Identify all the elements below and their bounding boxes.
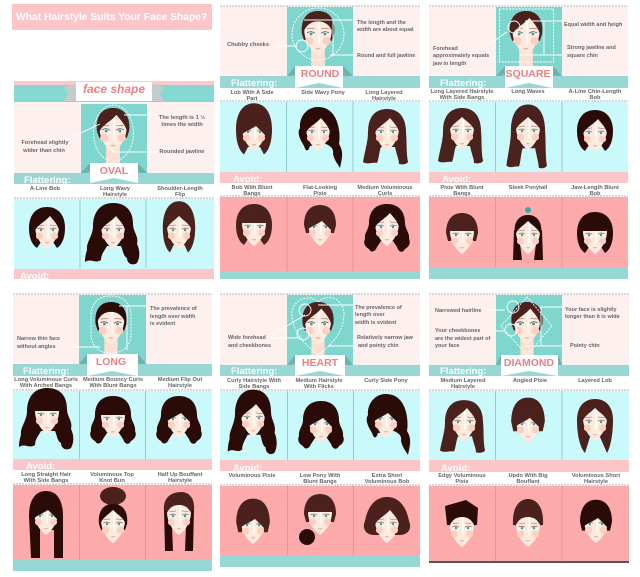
heart avoid hairstyles: [236, 494, 410, 545]
long flattering labels: Medium Flip Out: [158, 377, 202, 383]
face shape ribbon: [64, 82, 164, 101]
round flattering labels: [230, 90, 403, 102]
flattering heading: Flattering:: [440, 78, 486, 89]
long flattering labels: [14, 377, 202, 389]
heart avoid labels: Blunt Bangs: [303, 479, 337, 485]
round notes: [227, 20, 415, 59]
long notes: The prevalence of: [150, 306, 197, 312]
diamond diagram lines: [486, 297, 565, 355]
diamond avoid labels: Pixie: [455, 479, 469, 485]
square notes: [432, 22, 623, 67]
square notes: approximately equals: [433, 53, 489, 59]
title: What Hairstyle Suits Your Face Shape?: [16, 12, 207, 23]
diamond avoid hairstyles: [445, 499, 612, 547]
round flattering labels: Side Wavy Pony: [301, 90, 346, 96]
long flattering labels: Hairstyle: [168, 383, 192, 389]
square flattering labels: Long Layered Hairstyle: [431, 89, 493, 95]
square avoid labels: Sleek Ponytail: [509, 185, 548, 191]
diamond notes: are the widest part of: [435, 336, 490, 342]
panel: diamond: [429, 294, 629, 563]
oval flattering hairstyles: [29, 201, 195, 264]
heart notes: length over: [355, 312, 386, 318]
diamond avoid labels: Edgy Voluminous: [438, 473, 486, 479]
avoid heading: Avoid:: [233, 174, 262, 185]
long notes: Narrow thin face: [17, 336, 60, 342]
diamond flattering labels: Hairstyle: [451, 384, 475, 390]
long notes: is evident: [150, 321, 176, 327]
oval flattering labels: A-Line Bob: [30, 186, 61, 192]
long banner: [79, 354, 146, 376]
round notes: Chubby cheeks: [227, 42, 269, 48]
diamond flattering labels: Medium Layered: [441, 378, 486, 384]
square notes: Forehead: [433, 46, 458, 52]
diamond notes: Your face is slightly: [565, 307, 617, 313]
square notes: Strong jawline and: [567, 45, 616, 51]
diamond flattering labels: Angled Pixie: [513, 378, 547, 384]
round avoid labels: Curls: [378, 191, 392, 197]
heart flattering labels: Curly Side Pony: [364, 378, 409, 384]
round flattering hairstyles: [236, 103, 408, 168]
diamond flattering hairstyles: [440, 398, 613, 453]
oval diagram lines: [66, 105, 157, 161]
square diagram lines: [485, 9, 562, 62]
heart notes: Wide forehead: [228, 335, 266, 341]
oval flattering labels: Shoulder-Length: [157, 186, 203, 192]
oval notes: [21, 114, 205, 155]
panel: oval: [14, 81, 214, 282]
diamond flattering labels: Layered Lob: [578, 378, 612, 384]
oval notes: times the width: [161, 122, 203, 128]
round avoid labels: Bangs: [243, 191, 261, 197]
diamond avoid labels: Hairstyle: [584, 479, 608, 485]
oval notes: Rounded jawline: [159, 149, 205, 155]
diamond notes: your face: [435, 343, 459, 349]
oval flattering labels: Hairstyle: [103, 192, 127, 198]
square avoid labels: Bob: [589, 191, 601, 197]
avoid heading: Avoid:: [442, 174, 471, 185]
avoid heading: Avoid:: [26, 461, 55, 472]
heart flattering labels: With Flicks: [304, 384, 334, 390]
diamond banner: [496, 355, 562, 376]
heart avoid labels: [229, 473, 410, 485]
long avoid labels: Voluminous Top: [90, 472, 134, 478]
long flattering labels: With Arched Bangs: [20, 383, 72, 389]
round banner: ROUND: [301, 68, 340, 80]
heart flattering labels: Curly Hairstyle With: [227, 378, 282, 384]
long notes: length over width: [150, 314, 196, 320]
round avoid labels: Pixie: [313, 191, 327, 197]
flattering heading: Flattering:: [23, 366, 69, 377]
heart notes: [228, 305, 414, 349]
diamond notes: Your cheekbones: [435, 328, 480, 334]
long notes: [16, 306, 197, 350]
avoid heading: Avoid:: [441, 463, 470, 474]
panel: heart: [220, 294, 420, 567]
diamond notes: [435, 307, 620, 349]
heart flattering hairstyles: [228, 390, 410, 455]
square banner: SQUARE: [506, 68, 550, 80]
heart avoid labels: Low Pony With: [300, 473, 341, 479]
oval banner: [81, 163, 147, 183]
round flattering labels: Lob With A Side: [230, 90, 274, 96]
heart flattering labels: [227, 378, 409, 390]
diamond avoid labels: Bouffant: [516, 479, 540, 485]
heart avoid labels: Extra Short: [372, 473, 402, 479]
long avoid labels: [21, 472, 203, 484]
avoid heading: Avoid:: [20, 271, 49, 282]
round flattering labels: Long Layered: [365, 90, 403, 96]
square notes: Equal width and heigh: [564, 22, 623, 28]
round notes: width are about equal: [356, 27, 414, 33]
round notes: The length and the: [357, 20, 406, 26]
round flattering labels: Hairstyle: [372, 96, 396, 102]
square flattering labels: Long Waves: [511, 89, 545, 95]
flattering heading: Flattering:: [231, 78, 277, 89]
heart banner: [287, 355, 353, 376]
flattering heading: Flattering:: [440, 366, 486, 377]
round avoid hairstyles: [236, 204, 410, 252]
square avoid hairstyles: [446, 207, 613, 260]
oval notes: The length is 1 ½: [159, 114, 205, 121]
avoid heading: Avoid:: [233, 463, 262, 474]
oval banner: OVAL: [100, 165, 129, 177]
panel: long: [13, 294, 212, 571]
flattering heading: Flattering:: [231, 366, 277, 377]
long banner: LONG: [96, 356, 126, 368]
long flattering labels: Long Voluminous Curls: [14, 377, 78, 383]
long flattering hairstyles: [19, 388, 202, 449]
long notes: without angles: [16, 344, 56, 350]
square notes: jaw in length: [432, 61, 467, 67]
square notes: square chin: [567, 53, 599, 59]
heart diagram lines: [272, 297, 355, 355]
round diagram lines: [275, 8, 355, 60]
square avoid labels: [440, 185, 619, 197]
oval notes: wider than chin: [22, 148, 65, 154]
diamond notes: Narrowed hairline: [435, 308, 481, 314]
long flattering labels: With Blunt Bangs: [89, 383, 137, 389]
heart flattering labels: Medium Hairstyle: [295, 378, 343, 384]
heart portrait: [289, 302, 347, 366]
heart notes: and pointy chin: [358, 343, 399, 349]
long avoid labels: Hairstyle: [168, 478, 192, 484]
diamond avoid labels: Voluminous Short: [572, 473, 620, 479]
heart notes: and cheekbones: [228, 343, 271, 349]
diamond banner: DIAMOND: [504, 357, 554, 369]
round avoid labels: Bob With Blunt: [231, 185, 273, 191]
oval flattering labels: [30, 186, 203, 198]
oval flattering labels: Long Wavy: [100, 186, 131, 192]
oval portrait: [83, 108, 143, 175]
round avoid labels: Flat-Looking: [303, 185, 338, 191]
round avoid labels: Medium Voluminous: [357, 185, 413, 191]
heart banner: HEART: [302, 357, 339, 369]
round banner: [287, 66, 353, 88]
square flattering labels: [431, 89, 622, 101]
square banner: [496, 66, 562, 88]
long portrait: [82, 302, 140, 366]
diamond notes: Pointy chin: [570, 343, 600, 349]
diamond portrait: [498, 302, 556, 366]
long flattering labels: Medium Bouncy Curls: [83, 377, 143, 383]
long avoid labels: With Side Bangs: [24, 478, 68, 484]
diamond notes: longer than it is wide: [565, 314, 620, 320]
oval notes: Forehead slightly: [21, 140, 69, 146]
square avoid labels: Bangs: [453, 191, 471, 197]
panel: square: [429, 6, 628, 279]
heart flattering labels: Side Bangs: [239, 384, 269, 390]
round flattering labels: Part: [246, 96, 258, 102]
long avoid labels: Long Straight Hair: [21, 472, 72, 478]
diamond avoid labels: Updo With Big: [508, 473, 548, 479]
face shape ribbon: face shape: [83, 82, 145, 96]
heart avoid labels: Voluminous Pixie: [229, 473, 275, 479]
heart notes: Relatively narrow jaw: [357, 335, 414, 341]
panel: round: [220, 6, 420, 279]
long diagram lines: [71, 296, 147, 353]
round notes: Round and full jawline: [357, 53, 415, 59]
round avoid labels: [231, 185, 413, 197]
heart avoid labels: Voluminous Bob: [365, 479, 410, 485]
long avoid labels: Knot Bun: [99, 478, 125, 484]
round portrait: [288, 11, 348, 78]
square flattering hairstyles: [438, 105, 613, 168]
heart notes: width is evident: [354, 320, 396, 326]
oval flattering labels: Flip: [175, 192, 186, 198]
square portrait: [496, 11, 556, 78]
flattering heading: Flattering:: [24, 175, 70, 186]
long avoid labels: Half Up Bouffant: [158, 472, 203, 478]
diamond flattering labels: [441, 378, 612, 390]
heart notes: The prevalence of: [355, 305, 402, 311]
square flattering labels: With Side Bangs: [440, 95, 484, 101]
square avoid labels: Pixie With Blunt: [440, 185, 484, 191]
square flattering labels: Bob: [589, 95, 601, 101]
long avoid hairstyles: [29, 487, 194, 558]
title: [12, 4, 212, 30]
square avoid labels: Jaw-Length Blunt: [571, 185, 619, 191]
square flattering labels: A-Line Chin-Length: [569, 89, 622, 95]
diamond avoid labels: [438, 473, 620, 485]
